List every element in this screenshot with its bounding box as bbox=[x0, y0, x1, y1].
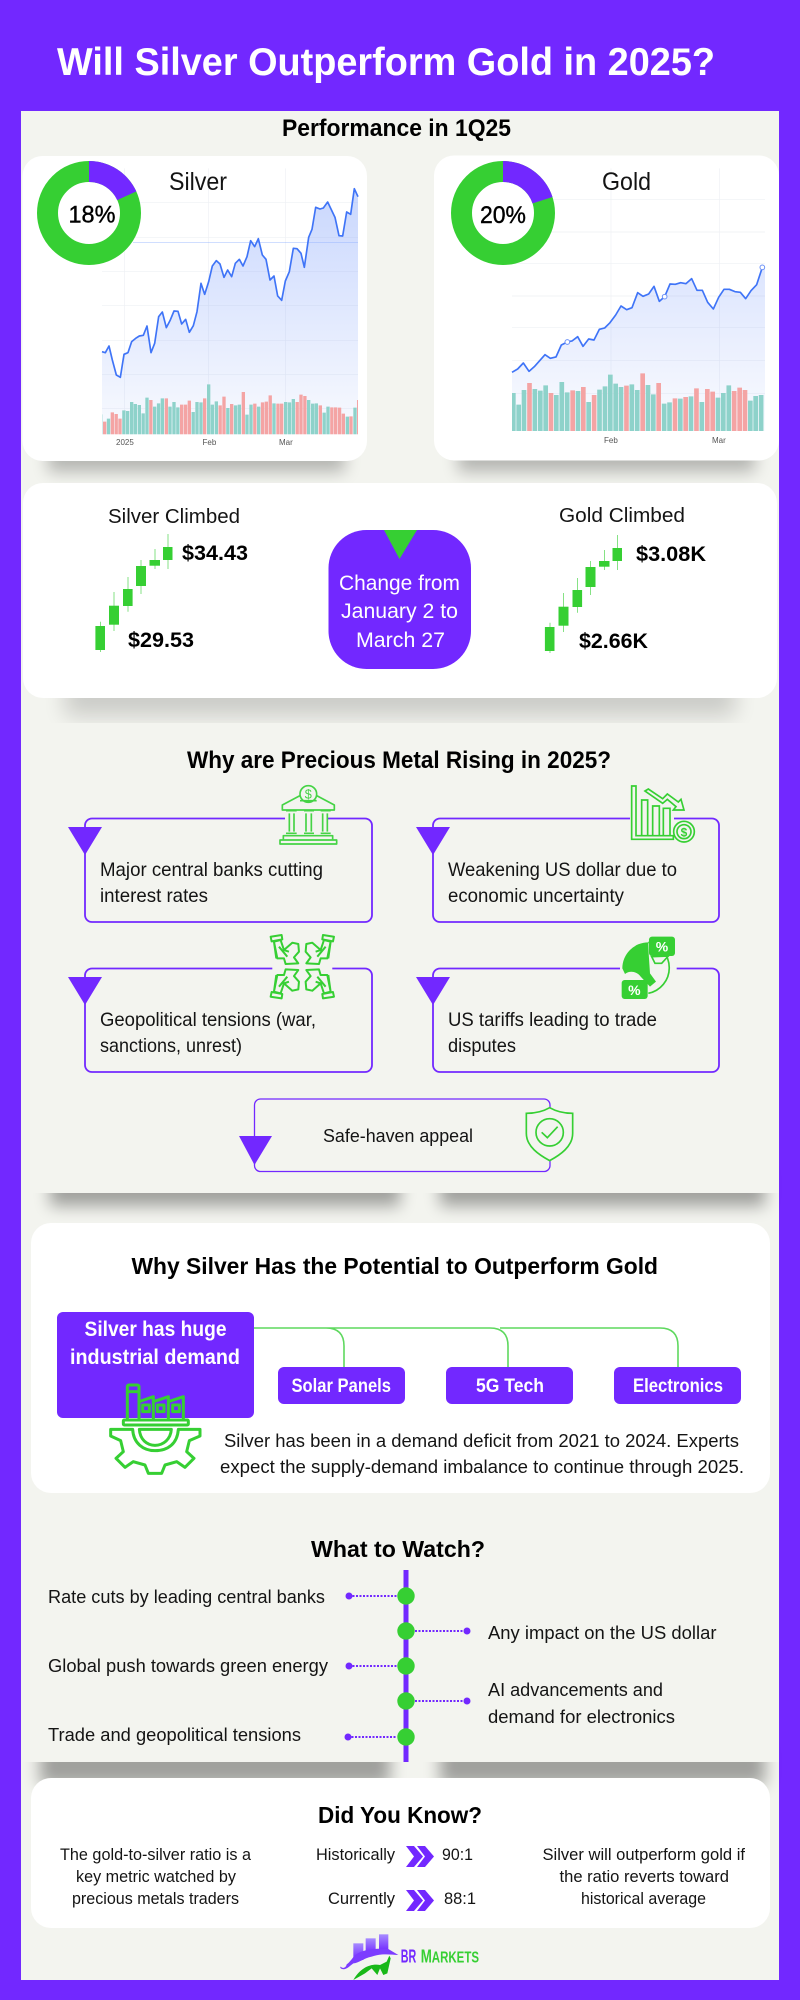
icon: bank bbox=[280, 786, 337, 844]
card: safe-haven appeal: Safe-haven appeal bbox=[323, 1125, 473, 1146]
callout: date range bbox=[328, 530, 471, 669]
item: ai advancements: AI advancements and bbox=[488, 1680, 663, 1700]
card: central banks: interest rates bbox=[100, 885, 208, 907]
logo: BR Markets: MARKETS bbox=[421, 1947, 479, 1967]
logo: BR Markets bbox=[340, 1934, 479, 1980]
title: Will Silver Outperform Gold in 2025? bbox=[57, 41, 715, 84]
connectors: demand tree bbox=[254, 1328, 678, 1367]
heading: silver potential: Why Silver Has the Potential to Outperform Gold bbox=[132, 1253, 658, 1279]
donut: gold 20% bbox=[462, 161, 552, 254]
icon: broken handshake bbox=[271, 935, 334, 998]
icon: tariff globe bbox=[620, 937, 677, 999]
chart: gold price and volume bbox=[512, 168, 765, 431]
card: weakening dollar: economic uncertainty bbox=[448, 885, 624, 907]
panel: why silver could outperform bbox=[31, 1223, 770, 1493]
box: electronics: Electronics bbox=[633, 1375, 723, 1397]
icon: tariff globe: % bbox=[656, 939, 669, 955]
box: 5G tech: 5G Tech bbox=[476, 1375, 544, 1397]
heading: silver climbed: Silver Climbed bbox=[108, 506, 240, 528]
box: industrial demand: Silver has huge bbox=[84, 1317, 227, 1341]
box: solar panels bbox=[278, 1367, 405, 1404]
text: ratio explanation: key metric watched by bbox=[76, 1868, 237, 1886]
axis labels: silver chart bbox=[116, 438, 293, 447]
stat: currently bbox=[328, 1890, 476, 1911]
box: industrial demand bbox=[57, 1312, 254, 1418]
item: us dollar: Any impact on the US dollar bbox=[488, 1623, 716, 1643]
stat: currently: Currently bbox=[328, 1890, 396, 1908]
item: rate cuts: Rate cuts by leading central banks bbox=[48, 1587, 325, 1607]
card: geopolitical tensions: sanctions, unrest) bbox=[100, 1035, 242, 1057]
callout: date range: Change from bbox=[339, 572, 460, 595]
panel: what to watch bbox=[21, 1493, 779, 1785]
text: outperformance condition bbox=[542, 1846, 745, 1908]
stat: historically: Historically bbox=[316, 1846, 396, 1864]
value: gold low: $2.66K bbox=[579, 630, 648, 653]
axis labels: gold chart: Mar bbox=[712, 436, 726, 445]
candlesticks: gold bbox=[545, 535, 622, 653]
card: us tariffs: US tariffs leading to trade bbox=[448, 1009, 657, 1031]
value: gold high: $3.08K bbox=[636, 543, 706, 566]
panel: why precious metals are rising bbox=[21, 723, 779, 1206]
icon: factory gear bbox=[111, 1385, 200, 1473]
card: weakening dollar bbox=[416, 786, 719, 922]
value: silver high: $34.43 bbox=[182, 542, 248, 565]
card: us tariffs: disputes bbox=[448, 1035, 516, 1057]
card: weakening dollar: Weakening US dollar due to bbox=[448, 859, 677, 881]
candlesticks: silver bbox=[95, 534, 172, 652]
panel: price change summary bbox=[23, 483, 777, 716]
box: 5G tech bbox=[446, 1367, 573, 1404]
text: ratio explanation: precious metals traders bbox=[72, 1890, 239, 1908]
stat: currently: 88:1 bbox=[444, 1890, 476, 1908]
card: geopolitical tensions: Geopolitical tensions (war, bbox=[100, 1009, 316, 1031]
card: safe-haven appeal bbox=[239, 1099, 573, 1172]
card: central banks bbox=[68, 786, 372, 922]
icon: bank: $ bbox=[305, 788, 312, 802]
heading: gold climbed: Gold Climbed bbox=[559, 505, 685, 527]
axis labels: gold chart: Feb bbox=[604, 436, 618, 445]
donut: gold 20%: 20% bbox=[480, 202, 526, 229]
box: industrial demand: industrial demand bbox=[70, 1345, 240, 1369]
text: demand deficit: Silver has been in a demand deficit from 2021 to 2024. Experts bbox=[224, 1431, 739, 1451]
logo: BR Markets: BR bbox=[401, 1947, 416, 1967]
value: silver low: $29.53 bbox=[128, 629, 194, 652]
box: solar panels: Solar Panels bbox=[292, 1375, 391, 1397]
timeline bbox=[344, 1570, 470, 1762]
heading: did you know: Did You Know? bbox=[318, 1802, 482, 1828]
text: ratio explanation: The gold-to-silver ratio is a bbox=[60, 1846, 252, 1864]
panel: gold performance card bbox=[434, 156, 779, 472]
axis labels: silver chart: 2025 bbox=[116, 438, 134, 447]
panel: silver performance card bbox=[22, 156, 367, 472]
icon: falling chart: $ bbox=[681, 825, 688, 839]
axis labels: silver chart: Mar bbox=[279, 438, 293, 447]
card: central banks: Major central banks cutting bbox=[100, 859, 323, 881]
card: geopolitical tensions bbox=[68, 935, 372, 1072]
text: demand deficit: expect the supply-demand imbalance to continue through 2025. bbox=[220, 1457, 744, 1477]
stat: historically: 90:1 bbox=[442, 1846, 473, 1864]
icon: falling chart bbox=[630, 786, 694, 842]
text: outperformance condition: the ratio reverts toward bbox=[560, 1868, 729, 1886]
box: electronics bbox=[614, 1367, 741, 1404]
icon: shield bbox=[526, 1108, 573, 1161]
heading: what to watch: What to Watch? bbox=[311, 1536, 485, 1562]
heading: why rising: Why are Precious Metal Rising in 2025? bbox=[187, 747, 611, 774]
card: us tariffs bbox=[416, 937, 719, 1072]
label: silver: Silver bbox=[169, 168, 227, 196]
donut: silver 18% bbox=[48, 161, 136, 254]
axis labels: gold chart bbox=[604, 436, 726, 445]
item: ai advancements: demand for electronics bbox=[488, 1707, 675, 1727]
donut: silver 18%: 18% bbox=[68, 202, 116, 228]
callout: date range: January 2 to bbox=[341, 600, 458, 623]
item: green energy: Global push towards green energy bbox=[48, 1656, 328, 1676]
text: ratio explanation bbox=[60, 1846, 252, 1908]
heading: performance: Performance in 1Q25 bbox=[282, 115, 511, 142]
chart: silver price and volume bbox=[101, 168, 359, 434]
panel: did you know bbox=[31, 1778, 770, 1928]
text: outperformance condition: Silver will outperform gold if bbox=[542, 1846, 745, 1864]
label: gold: Gold bbox=[602, 168, 651, 196]
item: trade tensions: Trade and geopolitical tensions bbox=[48, 1725, 301, 1745]
text: outperformance condition: historical average bbox=[581, 1890, 706, 1908]
text: demand deficit bbox=[220, 1431, 744, 1477]
callout: date range: March 27 bbox=[356, 629, 445, 652]
axis labels: silver chart: Feb bbox=[202, 438, 217, 447]
item: ai advancements bbox=[488, 1680, 675, 1727]
stat: historically bbox=[316, 1846, 473, 1867]
icon: tariff globe: % bbox=[628, 982, 641, 998]
